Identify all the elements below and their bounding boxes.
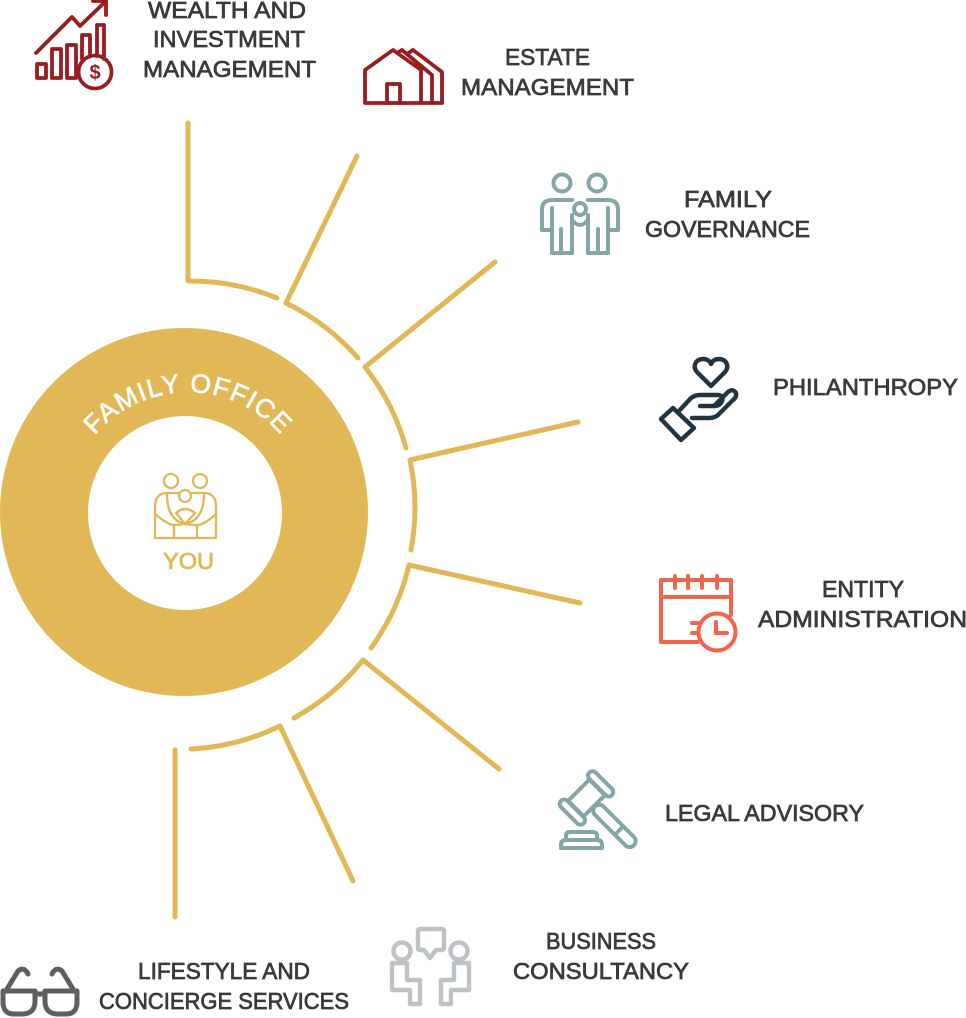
spokes and arc segments — [175, 123, 580, 917]
icon: houses — [365, 50, 442, 103]
item: legal advisory — [558, 769, 864, 863]
label: CONCIERGE SERVICES — [99, 988, 349, 1014]
item: philanthropy — [661, 359, 958, 440]
item: lifestyle and concierge services — [3, 958, 349, 1014]
icon: two people talking — [392, 929, 469, 1004]
icon: family — [542, 174, 618, 253]
family office ring — [0, 328, 368, 696]
icon: chart with dollar: $ — [89, 62, 101, 84]
item: family governance — [542, 174, 810, 253]
label: ESTATE — [505, 44, 590, 70]
ring title: FAMILY OFFICE — [82, 374, 293, 434]
item: estate management — [365, 44, 634, 103]
icon: family — [155, 474, 216, 538]
label: ADMINISTRATION — [758, 606, 966, 632]
item: business consultancy — [392, 928, 689, 1004]
label: CONSULTANCY — [513, 958, 689, 984]
label: INVESTMENT — [153, 26, 305, 52]
label: PHILANTHROPY — [773, 374, 958, 400]
icon: hand and heart — [661, 359, 736, 440]
icon: calendar with clock — [661, 576, 736, 650]
label: MANAGEMENT — [143, 56, 316, 82]
label: you: YOU — [163, 548, 214, 574]
label: ENTITY — [822, 576, 904, 602]
centre: you — [155, 474, 216, 574]
label: LIFESTYLE AND — [138, 958, 310, 984]
icon: glasses — [3, 969, 77, 1014]
icon: chart with dollar — [36, 1, 112, 88]
label: FAMILY — [684, 186, 772, 212]
label: GOVERNANCE — [645, 216, 810, 242]
icon: gavel — [558, 769, 651, 863]
item: entity administration — [661, 576, 966, 650]
item: wealth and investment management — [36, 0, 316, 88]
label: LEGAL ADVISORY — [665, 800, 864, 826]
label: MANAGEMENT — [461, 74, 634, 100]
label: BUSINESS — [546, 928, 656, 954]
